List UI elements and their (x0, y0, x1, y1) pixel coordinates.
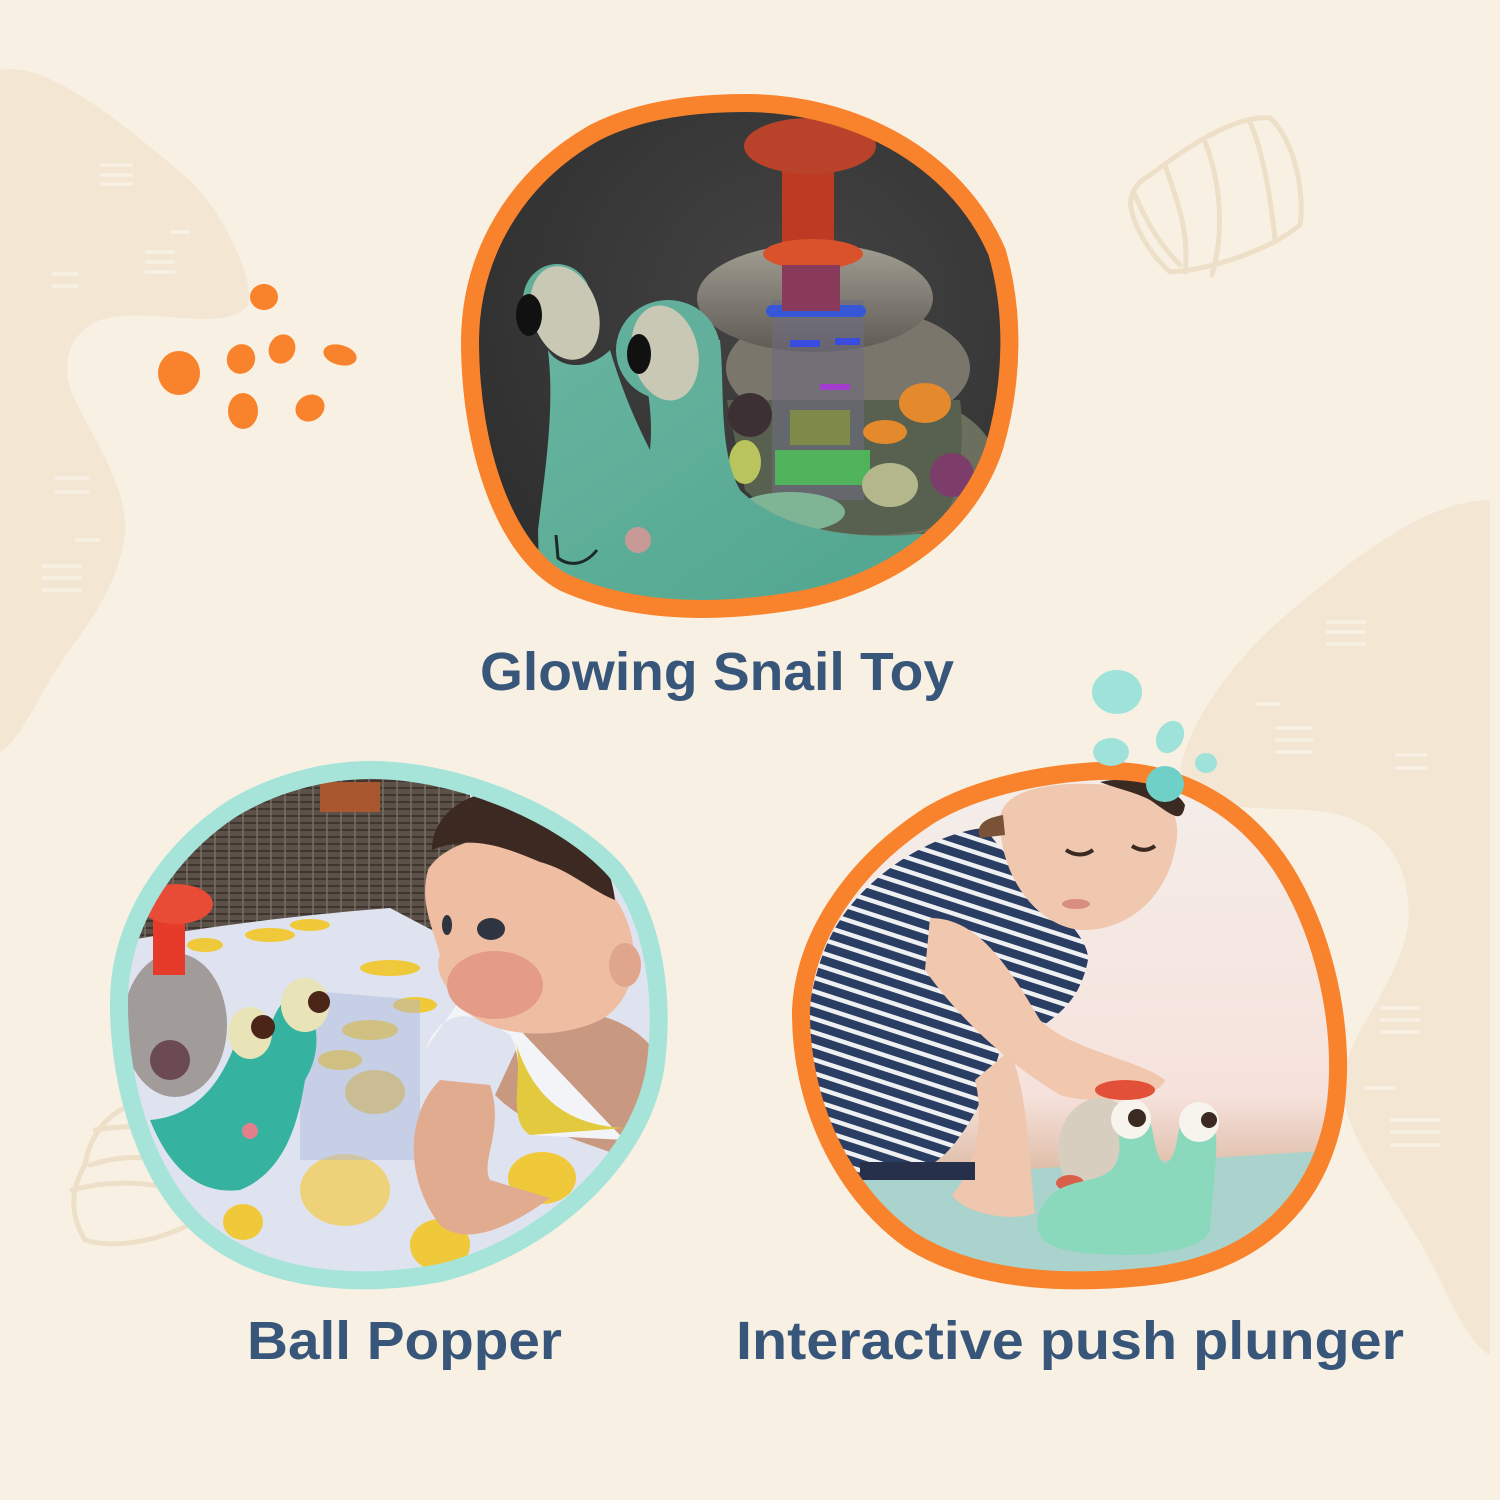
doodle: striped shell bottom left (72, 1103, 205, 1244)
heading: Interactive push plunger: Interactive push plunger (736, 1311, 1404, 1371)
teal snail toy (123, 884, 330, 1191)
left background blob (0, 69, 249, 752)
red plunger (744, 118, 876, 311)
panel: interactive push plunger photo (790, 760, 1360, 1300)
right background blob (1180, 500, 1490, 1355)
doodle: striped shell top right (1131, 118, 1301, 275)
baby body (414, 790, 660, 1234)
orange dots (158, 284, 359, 429)
panel: ball popper photo (100, 760, 690, 1300)
teal dots (1092, 670, 1217, 802)
baby second arm (952, 1050, 1035, 1217)
mint snail toy (1037, 1080, 1219, 1255)
blanket shade (300, 990, 420, 1160)
baby torso with striped shirt (804, 828, 1088, 1180)
heading: Ball Popper: Ball Popper (247, 1311, 562, 1371)
panel: glowing snail toy photo (450, 90, 1030, 630)
baby head and hair (979, 780, 1185, 930)
blanket lemons (187, 919, 576, 1271)
baby arm (925, 918, 1165, 1100)
heading: Glowing Snail Toy: Glowing Snail Toy (480, 642, 954, 702)
snail shell (697, 244, 996, 540)
wicker chair (139, 778, 470, 938)
snail body (516, 264, 924, 600)
